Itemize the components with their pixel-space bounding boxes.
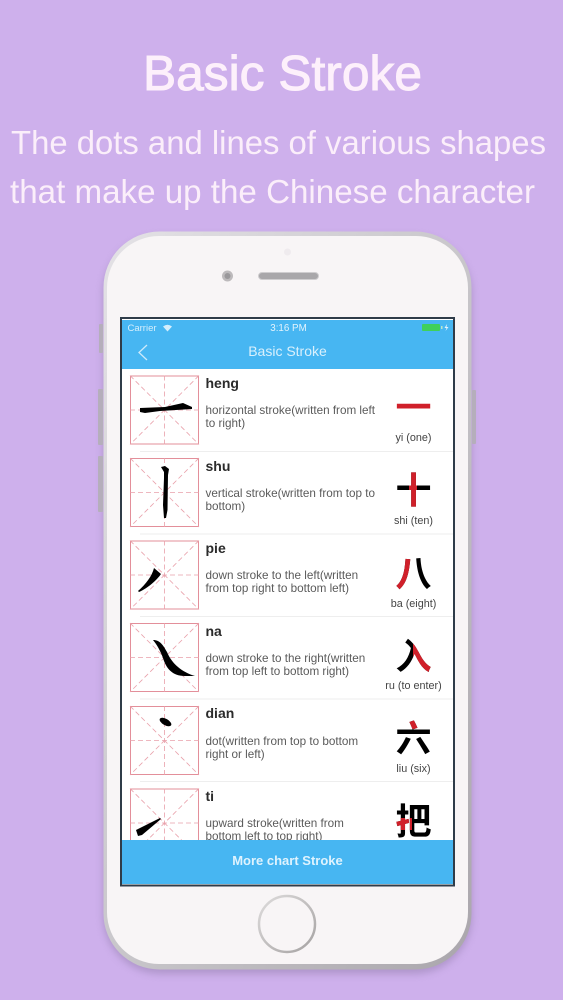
example: liu: 六 xyxy=(395,710,432,762)
row: pie: ba (eight) xyxy=(391,598,436,610)
row: shu: shi (ten) xyxy=(394,515,433,527)
row: ti: bottom left to top right) xyxy=(206,830,323,843)
row: na: na xyxy=(206,623,222,639)
row: heng xyxy=(130,375,432,444)
example: shi xyxy=(397,472,430,507)
icon: wifi xyxy=(163,325,172,332)
sensor xyxy=(284,248,291,256)
home button xyxy=(259,896,315,952)
row: pie: down stroke to the left(written xyxy=(206,569,358,582)
row: pie: pie xyxy=(206,540,226,556)
subtitle: The dots and lines of various shapes xyxy=(11,124,546,161)
row: na: down stroke to the right(written xyxy=(206,652,365,665)
status bar: Carrier xyxy=(128,323,157,334)
icon: battery xyxy=(422,324,448,331)
nav title: Basic Stroke xyxy=(248,343,327,359)
row: shu: bottom) xyxy=(206,500,245,513)
phone xyxy=(98,232,476,974)
example: ba (hold): 把 xyxy=(395,793,432,845)
example: ba xyxy=(396,558,431,590)
speaker xyxy=(258,272,318,280)
row: dian: right or left) xyxy=(206,748,265,761)
row: heng: horizontal stroke(written from left xyxy=(206,404,376,417)
row: na: from top left to bottom right) xyxy=(206,665,349,678)
bottom button: More chart Stroke xyxy=(232,853,343,868)
icon: back arrow xyxy=(139,345,147,360)
row: na: ru (to enter) xyxy=(385,680,442,692)
row: dian: liu (six) xyxy=(396,763,431,775)
row: pie xyxy=(130,540,436,610)
screen xyxy=(121,318,454,886)
row: heng: heng xyxy=(206,375,239,391)
row: ti xyxy=(130,788,431,840)
row: ti: upward stroke(written from xyxy=(206,817,344,830)
row: dian xyxy=(130,705,432,775)
title: Basic Stroke xyxy=(143,47,422,101)
example: ba: 八 xyxy=(395,545,432,597)
example: shi: 十 xyxy=(395,462,432,514)
example: shi: 十 xyxy=(395,462,432,514)
phone body xyxy=(104,232,472,970)
row: heng: yi (one) xyxy=(395,432,432,444)
row: shu: vertical stroke(written from top to xyxy=(206,487,376,500)
example: liu: 六 xyxy=(395,710,432,762)
subtitle xyxy=(10,124,546,210)
side buttons xyxy=(98,324,476,512)
row: heng: to right) xyxy=(206,417,245,430)
row: ti: ti xyxy=(206,788,214,804)
example: ru: 入 xyxy=(395,628,432,680)
example: yi: 一 xyxy=(395,379,432,431)
row: dian: dian xyxy=(206,705,234,721)
stroke list xyxy=(130,375,453,858)
nav bar: 3:16 PM xyxy=(270,323,307,334)
example: ru xyxy=(396,638,431,672)
example: liu xyxy=(396,720,430,754)
row: na xyxy=(130,623,442,692)
example: ba: 八 xyxy=(395,545,432,597)
example: ba (hold) xyxy=(396,803,431,838)
row: dian: dot(written from top to bottom xyxy=(206,735,358,748)
subtitle: that make up the Chinese character xyxy=(10,173,535,210)
nav bar xyxy=(122,320,453,369)
row: pie: from top right to bottom left) xyxy=(206,582,349,595)
camera xyxy=(222,270,233,282)
row: shu xyxy=(130,458,433,527)
bottom button xyxy=(122,840,453,884)
row: shu: shu xyxy=(206,458,230,474)
example: ba (hold): 把 xyxy=(395,793,432,845)
phone shadow xyxy=(103,236,472,974)
example: ru: 入 xyxy=(395,628,432,680)
